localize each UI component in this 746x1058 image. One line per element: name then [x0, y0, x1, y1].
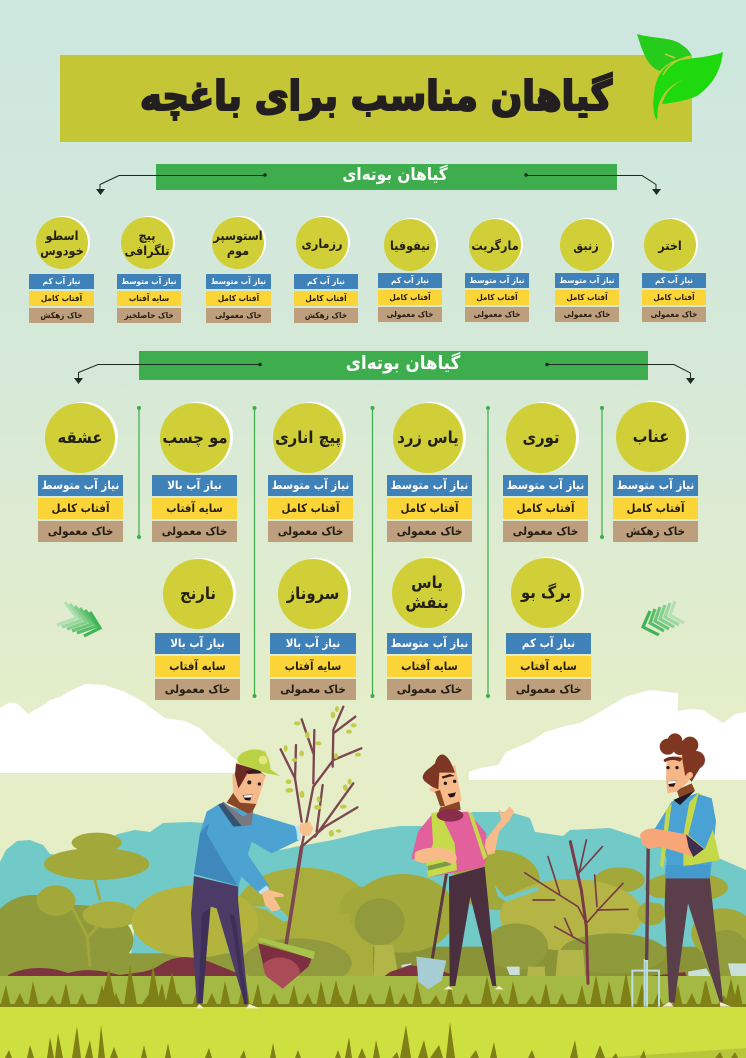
person: man with shovel [411, 807, 514, 989]
background trees: right side [350, 850, 746, 987]
plant card: پیچ اناری: نیاز آب متوسط [272, 478, 349, 492]
upper body of man with pitchfork [640, 733, 720, 960]
plant card: رزماری: آفتاب کامل [305, 293, 347, 303]
green column dividers [137, 406, 604, 698]
plant card: نیفوفیا: آفتاب کامل [389, 292, 431, 302]
plant card: استوسپر موم: موم [227, 243, 249, 258]
plant card: نیفوفیا: خاک معمولی [387, 309, 433, 319]
plant card: نارنج [155, 558, 240, 700]
plant card: اختر: اختر [658, 238, 682, 252]
plant card: رزماری: نیاز آب کم [307, 276, 345, 286]
plant card: توری: خاک معمولی [513, 524, 578, 538]
plant card: یاس زرد: آفتاب کامل [401, 501, 458, 515]
arms [415, 807, 514, 863]
plant card: زنبق: نیاز آب متوسط [559, 275, 615, 285]
plant card: سروناز: سروناز [287, 584, 339, 603]
clouds [0, 684, 746, 780]
plant card: اسطو خودوس: خودوس [40, 243, 84, 258]
vest [426, 812, 457, 877]
plant card: مو چسب: سایه آفتاب [166, 501, 223, 515]
plant card: نیفوفیا: نیاز آب کم [391, 275, 429, 285]
plant card: زنبق [555, 218, 619, 322]
plant card: سروناز: خاک معمولی [280, 682, 346, 696]
plant card: نارنج: نیاز آب بالا [170, 636, 225, 650]
sweater [194, 803, 299, 887]
plant card: مارگریت: نیاز آب متوسط [469, 275, 525, 285]
plant card: سروناز: نیاز آب بالا [286, 636, 340, 650]
legs [449, 867, 496, 986]
plant card: رزماری: رزماری [302, 236, 342, 250]
title banner [60, 55, 692, 142]
vest [660, 803, 672, 869]
plant card: پیچ تلگرافی: خاک حاصلخیز [124, 310, 174, 320]
plant card: برگ بو [506, 557, 591, 700]
plant card: یاس بنفش: خاک معمولی [397, 682, 462, 696]
bare tree [525, 840, 628, 983]
arrows: first category [96, 173, 661, 195]
plant card: عناب: نیاز آب متوسط [617, 478, 694, 492]
plant card: اسطو خودوس: اسطو [46, 228, 78, 243]
plant card: سروناز: سایه آفتاب [285, 659, 341, 673]
legs [191, 876, 248, 1005]
legs [665, 877, 723, 1004]
plant card: عشقه: خاک معمولی [48, 524, 113, 538]
plant card: استوسپر موم: نیاز آب متوسط [211, 276, 266, 286]
icon: right chevrons [641, 600, 685, 636]
plant card: رزماری [294, 216, 358, 323]
plant card: عشقه: نیاز آب متوسط [42, 478, 119, 492]
plant card: استوسپر موم: آفتاب کامل [218, 293, 259, 303]
plant card: یاس بنفش: یاس [411, 573, 443, 592]
plant card: اختر: خاک معمولی [651, 309, 697, 319]
plant card: اختر: آفتاب کامل [653, 292, 695, 302]
plant card: یاس زرد: یاس زرد [397, 428, 459, 447]
plant card: یاس بنفش: بنفش [405, 593, 449, 612]
plant card: سروناز [270, 558, 356, 700]
root ball [258, 943, 312, 989]
head [666, 755, 688, 793]
plant card: اسطو خودوس: آفتاب کامل [41, 293, 82, 303]
plant card: اختر [642, 218, 706, 322]
plant card: اختر: نیاز آب کم [655, 275, 693, 285]
plant card: مارگریت: آفتاب کامل [476, 292, 518, 302]
shirt [411, 812, 486, 877]
plant card: مو چسب: خاک معمولی [162, 524, 227, 538]
plant card: پیچ تلگرافی: پیچ [139, 228, 155, 243]
person: man with pitchfork [632, 877, 731, 1007]
plant card: برگ بو: خاک معمولی [516, 682, 581, 696]
plant card: توری: نیاز آب متوسط [507, 478, 584, 492]
plant card: استوسپر موم: خاک معمولی [215, 310, 262, 320]
plant card: عناب: عناب [633, 427, 669, 446]
neck and collar [677, 783, 695, 800]
plant card: یاس بنفش: سایه آفتاب [401, 659, 458, 673]
plant card: مو چسب: نیاز آب بالا [167, 478, 222, 492]
sapling [281, 707, 361, 945]
plant card: اسطو خودوس [29, 216, 94, 323]
plant card: زنبق: آفتاب کامل [566, 292, 608, 302]
shovel [432, 863, 448, 958]
plant card: پیچ اناری: خاک معمولی [278, 524, 343, 538]
plant card: مو چسب [152, 402, 237, 542]
plant card: نیفوفیا [378, 218, 442, 322]
shirt [653, 793, 716, 878]
plant card: پیچ اناری [268, 402, 353, 542]
plant card: اسطو خودوس: نیاز آب کم [43, 276, 80, 286]
plant card: نارنج: سایه آفتاب [169, 659, 226, 673]
plant card: پیچ اناری: پیچ اناری [275, 428, 341, 447]
section heading: second category [139, 351, 648, 380]
plant card: یاس زرد: خاک معمولی [397, 524, 462, 538]
plant card: استوسپر موم: استوسپر [213, 228, 263, 243]
plant card: نارنج: نارنج [180, 584, 216, 603]
plant card: یاس زرد: نیاز آب متوسط [391, 478, 468, 492]
background trees: left side [0, 833, 387, 988]
plant card: مو چسب: مو چسب [162, 428, 228, 447]
plant card: پیچ تلگرافی [117, 216, 181, 323]
plant card: پیچ تلگرافی: نیاز آب متوسط [121, 276, 177, 286]
title: گیاهان مناسب برای باغچه [140, 72, 612, 120]
hard hat [237, 749, 280, 776]
pitchfork handle [647, 838, 648, 960]
plant card: برگ بو: نیاز آب کم [522, 636, 575, 650]
plant card: عناب: آفتاب کامل [627, 501, 684, 515]
arm [640, 829, 703, 857]
plant card: عناب [613, 401, 698, 542]
foreground grass [5, 1022, 738, 1058]
icon: green leaves [637, 34, 723, 120]
arrows: second category [74, 362, 695, 384]
plant card: پیچ تلگرافی: تلگرافی [125, 243, 169, 258]
plant card: توری: آفتاب کامل [517, 501, 574, 515]
plant card: مارگریت [465, 218, 529, 322]
lime ground [0, 1007, 746, 1058]
plant card: توری [503, 402, 588, 542]
plant card: مارگریت: مارگریت [471, 238, 519, 252]
plant card: عشقه: آفتاب کامل [52, 501, 109, 515]
plant card: استوسپر موم [206, 216, 271, 323]
plant card: پیچ اناری: آفتاب کامل [282, 501, 339, 515]
plant card: نیفوفیا: نیفوفیا [390, 238, 430, 252]
section heading: second category: گیاهان بوته‌ای [346, 353, 460, 374]
plant card: برگ بو: سایه آفتاب [520, 659, 577, 673]
plant card: یاس بنفش: نیاز آب متوسط [391, 636, 468, 650]
soil mounds [8, 957, 262, 985]
head [232, 770, 266, 804]
icon: left chevrons [56, 601, 102, 638]
teal hills [0, 812, 746, 970]
grass band [0, 976, 746, 1006]
head of man with shovel [423, 754, 463, 822]
plant card: نارنج: خاک معمولی [165, 682, 230, 696]
neck and collar [227, 790, 257, 815]
plant card: یاس بنفش [387, 557, 472, 700]
plant card: عناب: خاک زهکش [626, 524, 685, 538]
plant card: توری: توری [522, 428, 560, 447]
section heading: first category: گیاهان بوته‌ای [342, 165, 448, 185]
plant card: پیچ تلگرافی: سایه آفتاب [129, 293, 169, 303]
section heading: first category [156, 164, 617, 190]
person: man planting a sapling [191, 706, 361, 1008]
plant card: عشقه [38, 402, 123, 542]
plant card: رزماری: خاک زهکش [305, 310, 347, 320]
plant card: عشقه: عشقه [58, 428, 102, 447]
hair [660, 733, 705, 782]
plant card: یاس زرد [387, 402, 472, 542]
plant card: زنبق: زنبق [573, 238, 599, 252]
plant card: اسطو خودوس: خاک زهکش [40, 310, 83, 320]
plant card: زنبق: خاک معمولی [564, 309, 610, 319]
pitchfork [632, 960, 659, 1007]
plant card: برگ بو: برگ بو [521, 583, 571, 602]
plant card: مارگریت: خاک معمولی [474, 309, 520, 319]
